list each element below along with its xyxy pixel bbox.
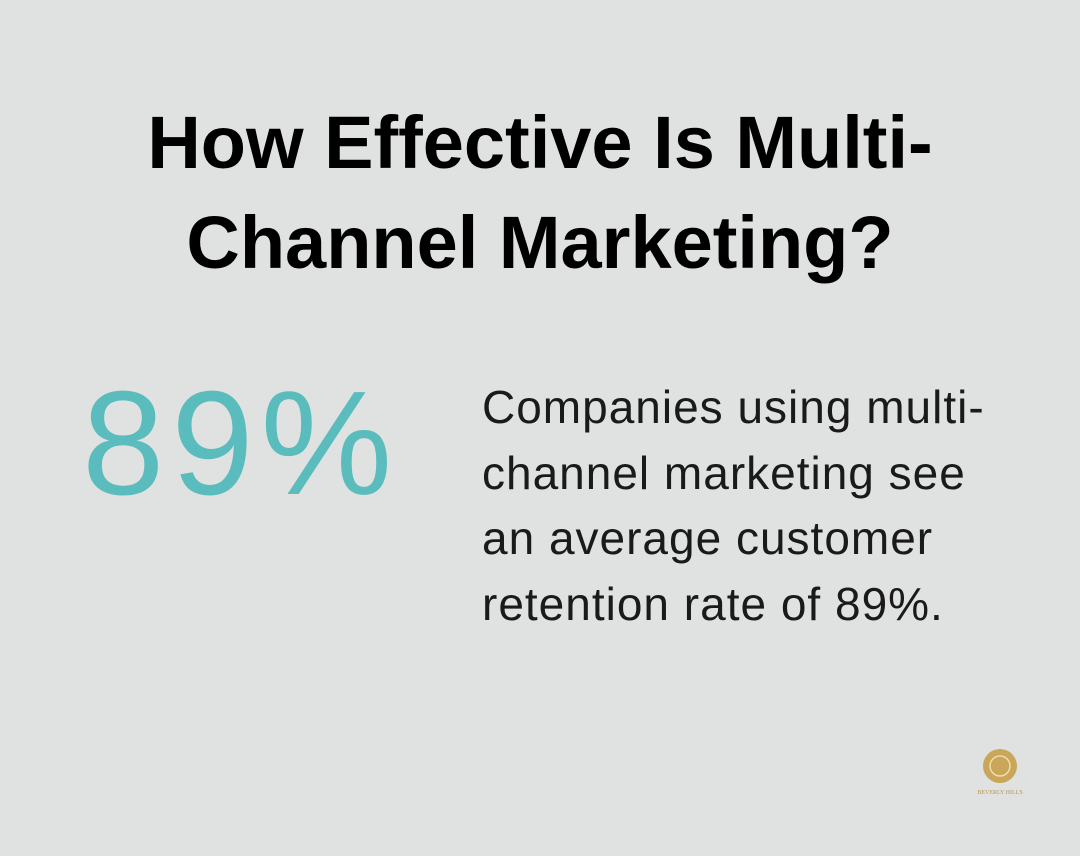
- description text: channel marketing see: [482, 446, 966, 498]
- description text: retention rate of 89%.: [482, 578, 944, 630]
- title: [147, 101, 933, 284]
- logo: [977, 749, 1023, 796]
- title: How Effective Is Multi-: [147, 101, 933, 184]
- description text: [482, 381, 985, 630]
- logo: BEVERLY HILLS: [977, 790, 1023, 796]
- description text: Companies using multi-: [482, 381, 985, 433]
- description text: an average customer: [482, 512, 933, 564]
- title: Channel Marketing?: [186, 201, 894, 284]
- big stat: 89%: [82, 361, 399, 526]
